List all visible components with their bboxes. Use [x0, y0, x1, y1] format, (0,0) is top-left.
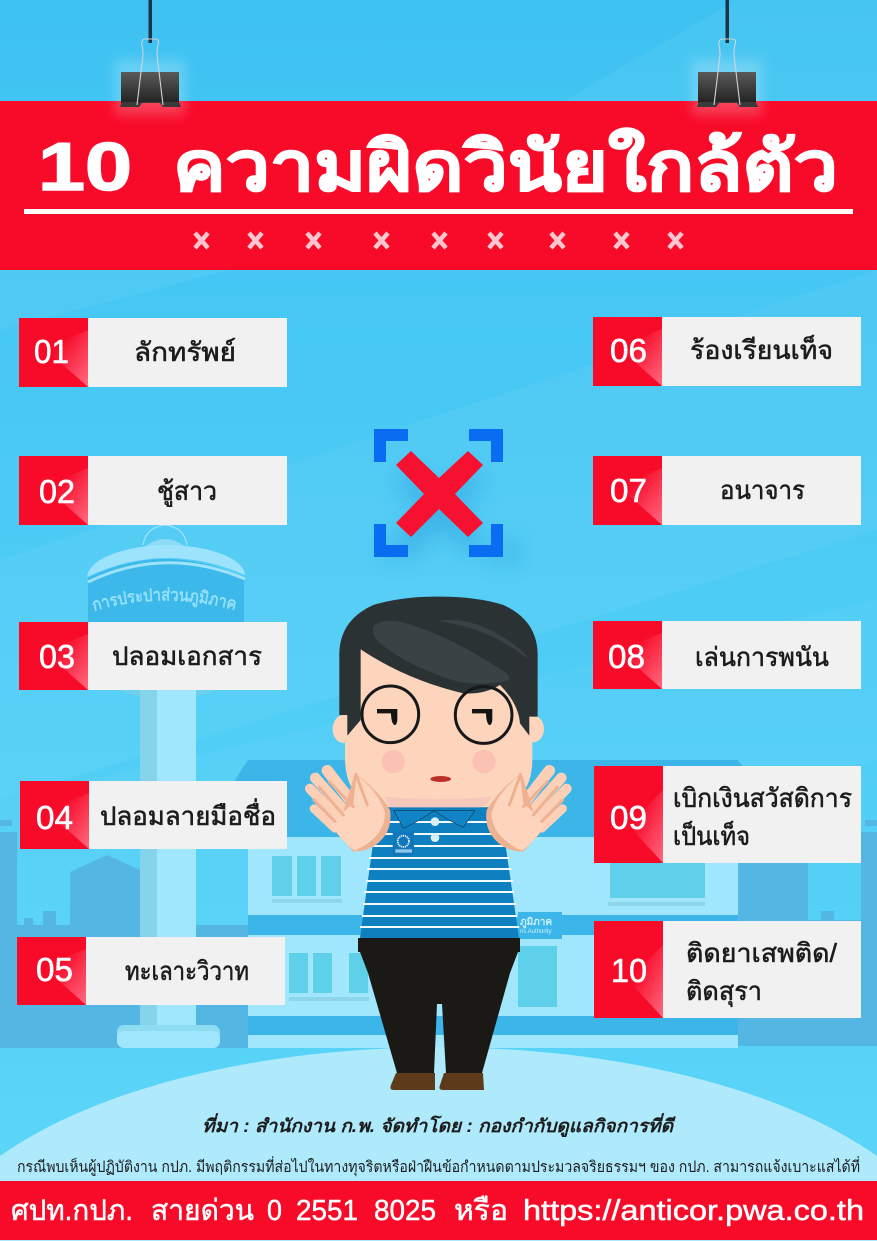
hotline text: 2551: [296, 1195, 358, 1227]
background: town buildings: ภูมิภาค: [520, 916, 552, 929]
card 03: ปลอมเอกสาร: [112, 641, 262, 671]
card 07: 07: [610, 472, 647, 509]
row of x marks: [195, 233, 682, 248]
card 10: [594, 921, 861, 1018]
card 06: 06: [610, 332, 647, 369]
card 02: 02: [39, 473, 75, 510]
head, collar and hands: [310, 597, 567, 856]
title: 10: [38, 129, 132, 205]
card 09: เบิกเงินสวัสดิการ: [673, 783, 852, 813]
banner: [0, 101, 877, 270]
card 01: 01: [34, 333, 69, 370]
shirt: [360, 807, 520, 938]
mouth: [430, 776, 451, 782]
card 02: ชู้สาว: [157, 476, 217, 507]
card 01: ลักทรัพย์: [134, 337, 236, 367]
card 04: [20, 781, 287, 849]
card 05: ทะเลาะวิวาท: [125, 956, 249, 986]
background: town buildings: [0, 760, 877, 1048]
hair: [339, 597, 538, 736]
card 07: [593, 456, 861, 525]
icon: red cross in blue frame: [374, 429, 520, 560]
card 10: ติดยาเสพติด/: [686, 938, 838, 968]
card 05: 05: [36, 951, 73, 988]
hotline text: สายด่วน: [151, 1195, 254, 1227]
hotline text: 0: [267, 1195, 282, 1227]
tower sign: การประปาส่วนภูมิภาค: [92, 587, 236, 611]
title: [38, 127, 838, 205]
left binder clip: [115, 0, 185, 115]
left hand: [310, 771, 390, 852]
source credit: ที่มา : สำนักงาน ก.พ. จัดทำโดย : กองกำกับดูแลกิจการที่ดี: [202, 1113, 676, 1138]
card 10: 10: [611, 952, 647, 989]
card 09: เป็นเท็จ: [673, 820, 750, 851]
card 09: [594, 766, 861, 863]
right hand: [486, 771, 567, 852]
cheeks: [382, 750, 405, 773]
card 08: 08: [608, 638, 645, 675]
hotline text: [11, 1195, 864, 1227]
card 08: [593, 621, 861, 689]
background: town buildings: ris Authority: [520, 929, 551, 935]
card 06: [593, 317, 861, 386]
card 08: เล่นการพนัน: [695, 642, 829, 672]
hotline text: หรือ: [454, 1195, 508, 1227]
card 04: ปลอมลายมือชื่อ: [100, 798, 276, 831]
card 04: 04: [36, 799, 73, 836]
glasses: [362, 686, 419, 743]
title: ความผิดวินัยใกล้ตัว: [173, 127, 838, 205]
card 03: [19, 622, 287, 690]
ears: [333, 715, 354, 743]
right binder clip: [692, 0, 762, 115]
legs: [360, 952, 518, 1073]
shoes: [390, 1073, 484, 1090]
character: [310, 597, 567, 1090]
card 06: ร้องเรียนเท็จ: [690, 334, 833, 365]
hotline text: https://anticor.pwa.co.th: [523, 1195, 864, 1227]
ground: [0, 1047, 877, 1241]
card 03: 03: [39, 638, 75, 675]
card 01: [19, 318, 287, 387]
card 10: ติดสุรา: [686, 976, 762, 1007]
hotline text: ศปท.กปภ.: [11, 1195, 133, 1227]
footer bar: [0, 1181, 877, 1240]
card 02: [19, 456, 287, 525]
card 09: 09: [610, 799, 647, 836]
pants waistband: [358, 938, 520, 952]
face: [345, 647, 532, 807]
card 07: อนาจาร: [720, 475, 805, 505]
badge: [393, 832, 414, 856]
hotline text: 8025: [374, 1195, 436, 1227]
background: water tower: [87, 525, 246, 1048]
eyes: [377, 709, 492, 725]
card 05: [17, 937, 285, 1005]
